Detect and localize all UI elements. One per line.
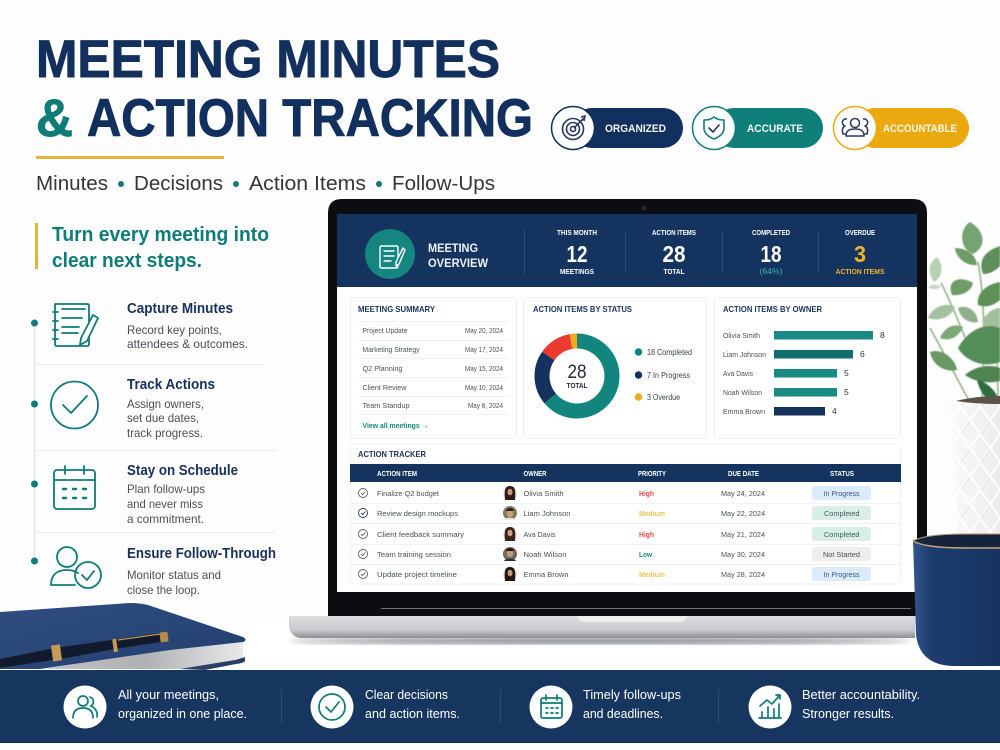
avatar: [503, 527, 517, 541]
stat: completed: 18: [760, 241, 782, 267]
donut chart: [542, 341, 612, 411]
row: review design mockups: [358, 506, 871, 520]
tagline: clear next steps.: [52, 250, 202, 272]
dashboard header: MEETING: [428, 243, 478, 255]
row: update project timeline: In Progress: [824, 570, 860, 579]
row: update project timeline: May 28, 2024: [721, 570, 765, 579]
table header: ACTION ITEM: [377, 469, 417, 478]
bar chart: Liam Johnson: [723, 350, 766, 359]
icon: person with check: [51, 547, 101, 588]
plant: [928, 222, 1000, 403]
step: capture minutes: Capture Minutes: [127, 301, 233, 317]
row: update project timeline: Emma Brown: [524, 570, 568, 579]
step: stay on schedule: Plan follow-ups: [127, 482, 205, 496]
bar chart: Olivia Smith: [723, 331, 760, 340]
panel: meeting summary: May 8, 2024: [468, 401, 503, 410]
title: [36, 30, 533, 148]
stat: completed: (64%): [760, 267, 783, 276]
title rule: [36, 156, 224, 159]
bar chart: 6: [860, 349, 865, 359]
icon: check circle: [51, 382, 98, 428]
stat: action items: 28: [662, 241, 686, 267]
avatar: [503, 547, 517, 561]
bar chart: 5: [844, 368, 849, 378]
timeline line: [34, 323, 35, 563]
notebook: [0, 603, 246, 670]
panel: action items by status: ACTION ITEMS BY STATUS: [533, 304, 632, 314]
mug: [913, 534, 1000, 666]
badge: accountable: ACCOUNTABLE: [883, 123, 957, 135]
subtitle: Minutes: [36, 173, 108, 195]
row: finalize q2 budget: High: [639, 489, 654, 498]
step: track actions: set due dates,: [127, 411, 199, 425]
step: capture minutes: Record key points,: [127, 323, 222, 337]
badge: accountable: [834, 106, 969, 150]
step: ensure follow-through: Monitor status and: [127, 568, 221, 582]
step: track actions: [31, 377, 215, 440]
laptop: [289, 199, 927, 644]
legend: [635, 348, 692, 402]
panel: meeting summary: May 20, 2024: [465, 326, 503, 335]
row: client feedback summary: [358, 527, 871, 541]
bar chart: [723, 330, 885, 416]
row: finalize q2 budget: Olivia Smith: [524, 489, 564, 498]
step: stay on schedule: and never miss: [127, 497, 203, 511]
benefit: follow-ups: and deadlines.: [583, 706, 663, 721]
stat: action items: TOTAL: [664, 267, 685, 276]
bar chart: Emma Brown: [723, 407, 765, 416]
icon: growth chart: [759, 695, 781, 718]
pen: [0, 631, 169, 668]
panel: meeting summary: Project Update: [362, 326, 408, 335]
title: ACTION TRACKING: [87, 89, 533, 148]
table header: DUE DATE: [728, 469, 759, 478]
panel: action items by status: 28: [568, 362, 586, 383]
icon: shield: [704, 117, 724, 139]
row: client feedback summary: High: [639, 530, 654, 539]
benefit: follow-ups: [530, 686, 681, 728]
stat: overdue: [836, 228, 884, 276]
badge: organized: [552, 106, 683, 150]
row: team training session: Noah Wilson: [524, 550, 566, 559]
panel: action items by owner: ACTION ITEMS BY OWNER: [723, 304, 822, 314]
stat: meetings: MEETINGS: [560, 267, 594, 276]
legend: 7 In Progress: [647, 371, 690, 380]
panel: meeting summary: May 17, 2024: [465, 345, 503, 354]
footer band: [0, 670, 1000, 743]
laptop bezel: [328, 199, 927, 616]
dashboard header: [337, 214, 917, 287]
row: team training session: May 30, 2024: [721, 550, 765, 559]
step: ensure follow-through: close the loop.: [127, 583, 200, 597]
row: update project timeline: Update project timeline: [377, 570, 457, 579]
panel: meeting summary: Client Review: [362, 383, 407, 392]
stat: meetings: [557, 228, 597, 276]
step: stay on schedule: Stay on Schedule: [127, 463, 238, 479]
row: review design mockups: May 22, 2024: [721, 509, 765, 518]
plant pot: [950, 396, 1000, 535]
stat: completed: [752, 228, 790, 276]
benefit: decisions: [310, 686, 460, 728]
dashboard header: OVERVIEW: [428, 258, 488, 270]
row: finalize q2 budget: In Progress: [824, 489, 860, 498]
stat: meetings: 12: [566, 241, 588, 267]
step: ensure follow-through: Ensure Follow-Through: [127, 546, 276, 562]
row: finalize q2 budget: [358, 486, 871, 500]
notebook cover: [0, 603, 246, 669]
icon: target: [562, 116, 585, 140]
bar chart: Ava Davis: [723, 369, 753, 378]
row: client feedback summary: Completed: [824, 530, 860, 539]
stat: overdue: 3: [854, 241, 866, 267]
step: capture minutes: attendees & outcomes.: [127, 337, 248, 351]
icon: notepad: [380, 246, 405, 268]
benefit: accountability: Better accountability.: [802, 687, 920, 702]
panel: meeting summary: MEETING SUMMARY: [358, 304, 435, 314]
stat: completed: COMPLETED: [752, 228, 790, 237]
notebook pages: [45, 640, 243, 669]
table header: OWNER: [524, 469, 547, 478]
tagline: [35, 223, 269, 272]
laptop screen: [337, 214, 917, 592]
stat: action items: [652, 228, 696, 276]
icon: calendar: [541, 695, 562, 718]
benefit: follow-ups: Timely follow-ups: [583, 687, 681, 702]
bar chart: Noah Wilson: [723, 388, 762, 397]
panel: meeting summary: [350, 298, 516, 438]
row: update project timeline: [358, 567, 871, 581]
table header: [350, 464, 901, 482]
panel: meeting summary: View all meetings →: [362, 421, 428, 430]
row: review design mockups: Liam Johnson: [524, 509, 570, 518]
table surface: [0, 620, 1000, 670]
benefit: decisions: and action items.: [365, 706, 460, 721]
subtitle: [36, 173, 495, 195]
step: stay on schedule: [31, 463, 238, 526]
icon: check: [319, 694, 345, 720]
row: review design mockups: Completed: [824, 509, 860, 518]
subtitle: Follow-Ups: [392, 173, 495, 195]
bar chart: 5: [844, 387, 849, 397]
row: team training session: Low: [639, 550, 652, 559]
panel: meeting summary: Q2 Planning: [362, 364, 402, 373]
stat: overdue: ACTION ITEMS: [836, 267, 884, 276]
icon: people: [73, 696, 97, 718]
row: update project timeline: Medium: [639, 570, 665, 579]
title: &: [36, 89, 73, 148]
panel: meeting summary: May 15, 2024: [465, 364, 503, 373]
legend: 18 Completed: [647, 348, 692, 357]
row: client feedback summary: Client feedback summary: [377, 530, 464, 539]
stat: overdue: OVERDUE: [845, 228, 875, 237]
row: team training session: Not Started: [823, 550, 860, 559]
benefit: decisions: Clear decisions: [365, 687, 448, 702]
row: client feedback summary: May 21, 2024: [721, 530, 765, 539]
panel: action items by owner: [714, 298, 900, 438]
panel: action items by status: [524, 298, 706, 438]
benefit: organized: [64, 686, 247, 728]
panel: action tracker: [350, 444, 901, 584]
avatar: [503, 486, 517, 500]
bar chart: 8: [880, 330, 885, 340]
badge: organized: ORGANIZED: [605, 123, 666, 135]
avatar: [503, 567, 517, 581]
stat: action items: ACTION ITEMS: [652, 228, 696, 237]
step: track actions: Assign owners,: [127, 397, 204, 411]
icon: calendar: [54, 466, 95, 509]
benefit: organized: organized in one place.: [118, 706, 247, 721]
panel: action tracker: ACTION TRACKER: [358, 449, 426, 459]
table header: PRIORITY: [638, 469, 666, 478]
step: capture minutes: [31, 301, 248, 351]
icon: notebook: [53, 304, 98, 346]
table header: STATUS: [830, 469, 854, 478]
badge: accurate: ACCURATE: [747, 123, 803, 135]
benefit: accountability: Stronger results.: [802, 706, 894, 721]
benefit: organized: All your meetings,: [118, 687, 219, 702]
row: client feedback summary: Ava Davis: [524, 530, 556, 539]
row: review design mockups: Review design mockups: [377, 509, 458, 518]
row: finalize q2 budget: Finalize Q2 budget: [377, 489, 440, 498]
panel: meeting summary: Marketing Strategy: [362, 345, 420, 354]
legend: 3 Overdue: [647, 393, 680, 402]
panel: action items by status: TOTAL: [566, 381, 588, 390]
benefit: accountability: [748, 686, 920, 728]
row: team training session: Team training session: [377, 550, 451, 559]
step: track actions: Track Actions: [127, 377, 215, 393]
step: track actions: track progress.: [127, 426, 203, 440]
avatar: [503, 506, 517, 520]
row: team training session: [358, 547, 871, 561]
step: ensure follow-through: [31, 546, 276, 597]
title: MEETING MINUTES: [36, 30, 500, 89]
subtitle: Decisions: [134, 173, 223, 195]
panel: meeting summary: Team Standup: [362, 401, 410, 410]
tagline: Turn every meeting into: [52, 224, 269, 246]
step: stay on schedule: a commitment.: [127, 512, 204, 526]
stat: meetings: THIS MONTH: [557, 228, 597, 237]
icon: team: [842, 118, 868, 136]
subtitle: Action Items: [249, 173, 366, 195]
row: finalize q2 budget: May 24, 2024: [721, 489, 765, 498]
badge: accurate: [692, 106, 823, 150]
bar chart: 4: [832, 406, 837, 416]
laptop base: [289, 616, 915, 644]
row: review design mockups: Medium: [639, 509, 665, 518]
panel: meeting summary: May 10, 2024: [465, 383, 503, 392]
